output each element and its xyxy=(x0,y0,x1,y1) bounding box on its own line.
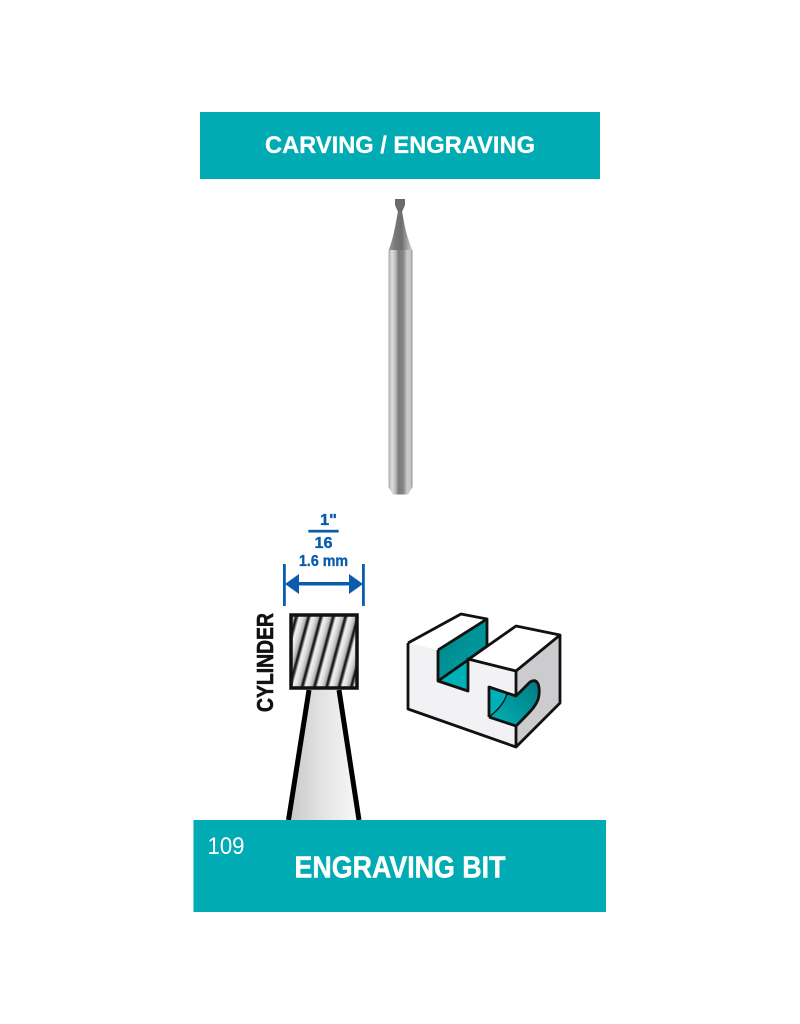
banner title: CARVING / ENGRAVING xyxy=(265,132,535,159)
product name: ENGRAVING BIT xyxy=(294,850,506,884)
material block: cut example xyxy=(408,614,560,747)
product number: 109 xyxy=(208,833,244,860)
slot wall xyxy=(438,619,487,681)
product photo: engraving bit xyxy=(388,199,412,494)
side groove xyxy=(489,681,539,726)
dimension label: fraction and millimetres: 1.6 mm xyxy=(299,553,348,570)
slot floor xyxy=(438,660,468,691)
bit diagram: tapered neck xyxy=(288,690,359,820)
bit diagram: cylinder head xyxy=(291,615,357,688)
top banner: carving / engraving xyxy=(200,112,600,179)
dimension label: fraction and millimetres: 1" xyxy=(320,512,337,529)
dimension label: fraction and millimetres: 16 xyxy=(314,535,333,552)
vertical label: cylinder: CYLINDER xyxy=(252,613,278,712)
dimension label: fraction and millimetres xyxy=(299,512,348,570)
dimension arrow xyxy=(283,564,365,606)
bottom banner xyxy=(194,820,606,912)
